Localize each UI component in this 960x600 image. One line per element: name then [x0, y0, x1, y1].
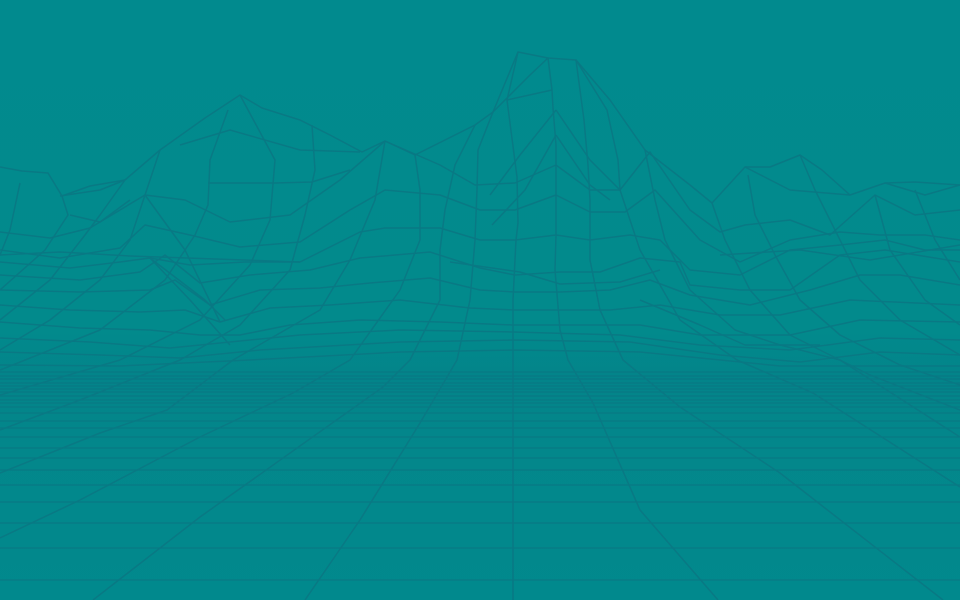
- mountain silhouette: [0, 52, 960, 203]
- floor rows: [0, 372, 960, 580]
- mountain rows: [0, 90, 960, 366]
